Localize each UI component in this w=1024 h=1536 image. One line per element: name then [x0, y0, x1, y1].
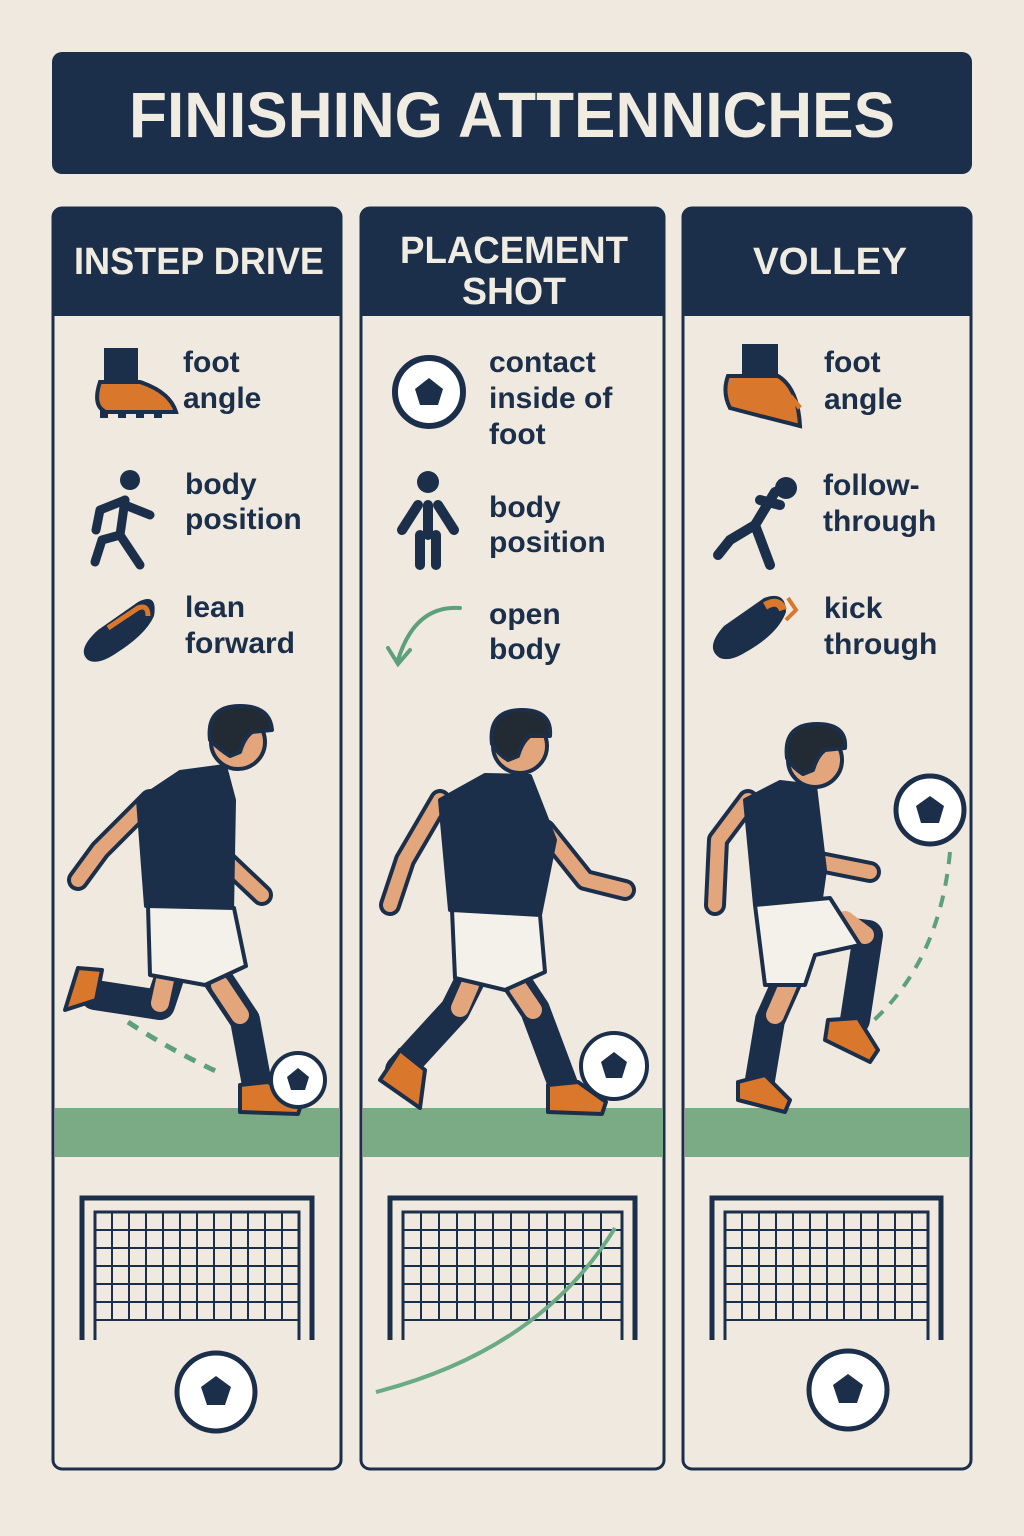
item: contact inside of foot: foot: [489, 418, 546, 451]
header: placement shot: PLACEMENT: [400, 230, 628, 272]
icon: ball: [395, 358, 463, 426]
item: body position: position: [489, 526, 606, 559]
panel: volley: [683, 208, 971, 1469]
player: volley: [715, 724, 878, 1112]
icon: running figure: [95, 470, 150, 565]
icon: curved arrow: [388, 608, 460, 664]
item: follow-through: through: [823, 505, 936, 538]
arrow: dashed ball path: [872, 852, 950, 1022]
item: lean forward: forward: [185, 627, 295, 660]
item: open body: open: [489, 598, 561, 631]
panel: placement shot: [361, 208, 664, 1469]
icon: kicking figure: [718, 477, 797, 565]
goal: [390, 1198, 635, 1340]
ball: [177, 1353, 255, 1431]
header: volley: [683, 208, 971, 316]
item: body position: body: [489, 491, 561, 524]
goal: [82, 1198, 312, 1340]
item: lean forward: lean: [185, 591, 245, 624]
item: open body: [388, 598, 561, 666]
player: instep drive: [65, 706, 302, 1114]
item: foot angle: foot: [183, 346, 240, 379]
arrow: dashed kick path: [128, 1022, 222, 1074]
arrow: curved shot trajectory: [376, 1228, 615, 1392]
item: foot angle: [725, 344, 902, 426]
item: body position: [95, 468, 302, 565]
item: lean forward: [84, 591, 295, 662]
item: foot angle: angle: [824, 383, 902, 416]
title banner: [52, 52, 972, 174]
icon: lean: [84, 599, 155, 662]
item: body position: body: [185, 468, 257, 501]
item: foot angle: [97, 346, 261, 415]
item: foot angle: angle: [183, 382, 261, 415]
icon: boot: [97, 348, 176, 414]
ball: [581, 1033, 647, 1099]
goal: [712, 1198, 941, 1340]
item: foot angle: foot: [824, 346, 881, 379]
panel: instep drive: [53, 208, 341, 1469]
item: kick through: [713, 592, 937, 661]
title banner: FINISHING ATTENNICHES: [129, 79, 895, 151]
green ground strip: [55, 1108, 340, 1157]
icon: boot: [725, 344, 800, 426]
item: kick through: through: [824, 628, 937, 661]
ball: [809, 1351, 887, 1429]
header: instep drive: [53, 208, 341, 316]
ball: [271, 1053, 325, 1107]
header: placement shot: SHOT: [462, 271, 566, 313]
header: placement shot: [361, 208, 664, 316]
item: kick through: kick: [824, 592, 883, 625]
player: placement shot: [380, 710, 625, 1114]
header: instep drive: INSTEP DRIVE: [74, 241, 324, 283]
item: contact inside of foot: [395, 346, 613, 451]
green ground strip: [685, 1108, 970, 1157]
item: contact inside of foot: inside of: [489, 382, 613, 415]
item: body position: [402, 471, 606, 565]
icon: standing figure: [402, 471, 454, 565]
item: body position: position: [185, 503, 302, 536]
item: contact inside of foot: contact: [489, 346, 596, 379]
item: open body: body: [489, 633, 561, 666]
item: follow-through: [718, 469, 936, 565]
header: volley: VOLLEY: [753, 241, 907, 283]
ball in air: [896, 776, 964, 844]
green ground strip: [363, 1108, 663, 1157]
item: follow-through: follow-: [823, 469, 920, 502]
icon: kick: [713, 596, 796, 659]
